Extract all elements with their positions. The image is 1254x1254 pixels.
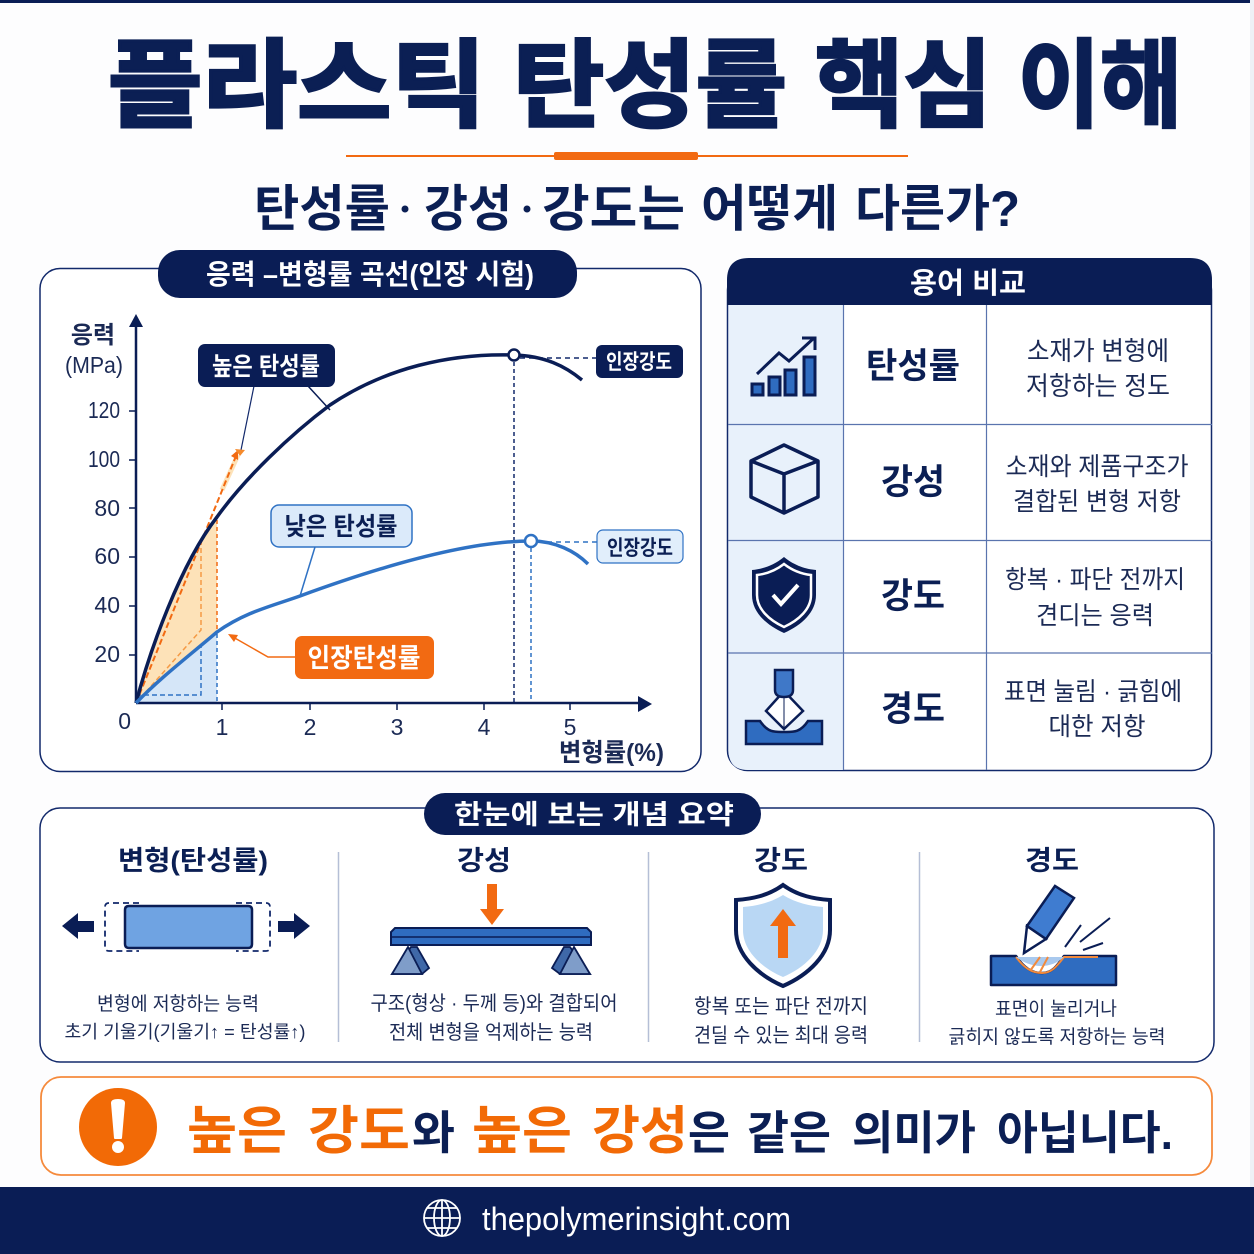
concept: stiffness: 구조(형상 · 두께 등)와 결합되어: [370, 992, 618, 1015]
row: strength: 항복 · 파단 전까지: [1005, 566, 1185, 594]
footer: [0, 1187, 1254, 1254]
subtitle: 탄성률: [254, 181, 390, 237]
callout: warning: 아닙니다.: [997, 1107, 1173, 1159]
row: elastic modulus: 탄성률: [866, 347, 960, 386]
table grid: [728, 305, 1212, 770]
row: stiffness: 강성: [881, 463, 945, 502]
callout: warning: 높은: [472, 1103, 572, 1161]
chart heading: [158, 250, 577, 298]
table header: 용어 비교: [910, 267, 1026, 300]
subtitle: [254, 181, 1020, 237]
row: strength: 견디는 응력: [1036, 602, 1154, 630]
concept: hardness: 긁히지 않도록 저항하는 능력: [948, 1026, 1166, 1048]
title underline: [346, 152, 908, 160]
concept: deformation: 변형(탄성률): [118, 846, 268, 876]
curve: high modulus: [136, 355, 582, 703]
curve: low modulus: [136, 541, 588, 703]
label: low modulus: 낮은 탄성률: [284, 513, 398, 541]
callout: warning: 와: [412, 1107, 455, 1159]
y axis label: (MPa): [65, 352, 123, 378]
concept: strength: [694, 846, 868, 1047]
icon: shield with arrow: [736, 885, 830, 986]
concept: deformation: [62, 846, 310, 1042]
row: hardness: 표면 눌림 · 긁힘에: [1004, 678, 1182, 706]
label: tensile modulus: [228, 634, 434, 679]
label: high modulus: 높은 탄성률: [212, 353, 320, 381]
row: elastic modulus: 소재가 변형에: [1027, 336, 1169, 366]
x axis tick labels: 4: [478, 714, 491, 740]
x axis tick labels: 3: [391, 714, 403, 740]
concept: deformation: 초기 기울기(기울기↑ = 탄성률↑): [64, 1022, 306, 1042]
row: stiffness: 결합된 변형 저항: [1013, 488, 1181, 516]
guide lines: [136, 358, 597, 703]
icon: stretched specimen: [62, 903, 310, 951]
subtitle: 어떻게: [701, 181, 838, 237]
callout: warning: [41, 1077, 1212, 1175]
icon: globe: [424, 1200, 460, 1236]
concept: strength: 강도: [754, 846, 808, 876]
subtitle: 강도는: [542, 181, 685, 237]
icon: rising bars: [752, 338, 815, 395]
concept: hardness: 표면이 눌리거나: [995, 998, 1117, 1020]
title: 탄성률: [513, 33, 787, 140]
row: strength: [752, 557, 1185, 633]
concept: stiffness: 강성: [457, 846, 511, 876]
icon column background: [728, 305, 843, 770]
table header: [727, 258, 1212, 305]
row: elastic modulus: [752, 336, 1170, 401]
concept: deformation: 변형에 저항하는 능력: [97, 993, 259, 1015]
label: tensile modulus: 인장탄성률: [308, 643, 420, 673]
blue area under low modulus curve: [136, 632, 217, 703]
x axis tick labels: 1: [216, 714, 228, 740]
label: low modulus: [271, 505, 412, 596]
orange area between curves: [136, 517, 217, 703]
title: 핵심: [815, 33, 992, 140]
pale tangent band: [222, 455, 238, 490]
y axis label: 응력: [71, 322, 115, 349]
icon: cube: [751, 445, 818, 513]
row: hardness: 대한 저항: [1048, 713, 1146, 741]
tensile strength markers: [508, 350, 537, 547]
concept: stiffness: 전체 변형을 억제하는 능력: [389, 1021, 593, 1044]
callout: warning: 높은: [187, 1103, 287, 1161]
y axis tick labels: 60: [94, 543, 120, 569]
summary heading: 한눈에 보는 개념 요약: [454, 800, 734, 830]
y axis tick labels: [88, 397, 131, 734]
title: 이해: [1018, 33, 1182, 140]
label: high modulus: [198, 344, 335, 456]
y axis tick labels: 80: [94, 495, 120, 521]
callout: warning: 의미가: [852, 1107, 976, 1159]
label: tensile strength high: 인장강도: [606, 351, 672, 374]
label: tensile strength low: [597, 530, 683, 563]
concept: hardness: [948, 846, 1166, 1048]
panel: terms comparison table: [727, 258, 1212, 770]
concept: strength: 견딜 수 있는 최대 응력: [694, 1024, 868, 1047]
y axis tick labels: 100: [88, 446, 120, 472]
callout: warning: 은: [688, 1107, 730, 1159]
concept: stiffness: [370, 846, 618, 1044]
row: elastic modulus: 저항하는 정도: [1026, 371, 1170, 401]
icon: shield check: [752, 557, 816, 633]
axes: [129, 314, 652, 712]
icon: loaded beam: [391, 884, 591, 974]
label: tensile strength low: 인장강도: [607, 537, 673, 560]
concept: strength: 항복 또는 파단 전까지: [694, 995, 868, 1018]
row: strength: 강도: [881, 577, 945, 616]
title: 플라스틱: [108, 33, 486, 140]
concept: hardness: 경도: [1025, 846, 1079, 876]
tangent line: high modulus: [136, 450, 238, 703]
x axis label: 변형률(%): [559, 739, 664, 767]
y axis label: [65, 322, 123, 378]
row: hardness: [746, 670, 1182, 744]
subtitle: 다른가?: [855, 181, 1020, 237]
title: [108, 33, 1182, 140]
y axis tick labels: 0: [118, 708, 131, 734]
chart heading: 응력 –변형률 곡선(인장 시험): [206, 259, 534, 290]
footer: thepolymerinsight.com: [482, 1201, 791, 1237]
row: stiffness: 소재와 제품구조가: [1006, 453, 1188, 481]
subtitle: 강성: [424, 181, 512, 237]
label: tensile strength high: [596, 345, 683, 378]
panel: stress-strain chart: [40, 250, 701, 772]
icon: exclamation: [79, 1088, 157, 1166]
callout: warning: 강성: [592, 1103, 688, 1161]
y axis tick labels: 20: [94, 641, 120, 667]
row: stiffness: [751, 445, 1188, 516]
y axis tick labels: 120: [88, 397, 120, 423]
summary heading: [424, 793, 761, 835]
callout: warning: 강도: [308, 1103, 410, 1161]
x axis tick labels: 5: [564, 714, 576, 740]
row: hardness: 경도: [881, 690, 945, 729]
y axis tick labels: 40: [94, 592, 120, 618]
panel: concept summary: [40, 793, 1214, 1062]
x axis tick labels: [216, 714, 576, 740]
icon: indenter: [746, 670, 822, 744]
x axis tick labels: 2: [304, 714, 316, 740]
icon: scratch tool: [991, 886, 1116, 985]
callout: warning: 같은: [747, 1107, 831, 1159]
